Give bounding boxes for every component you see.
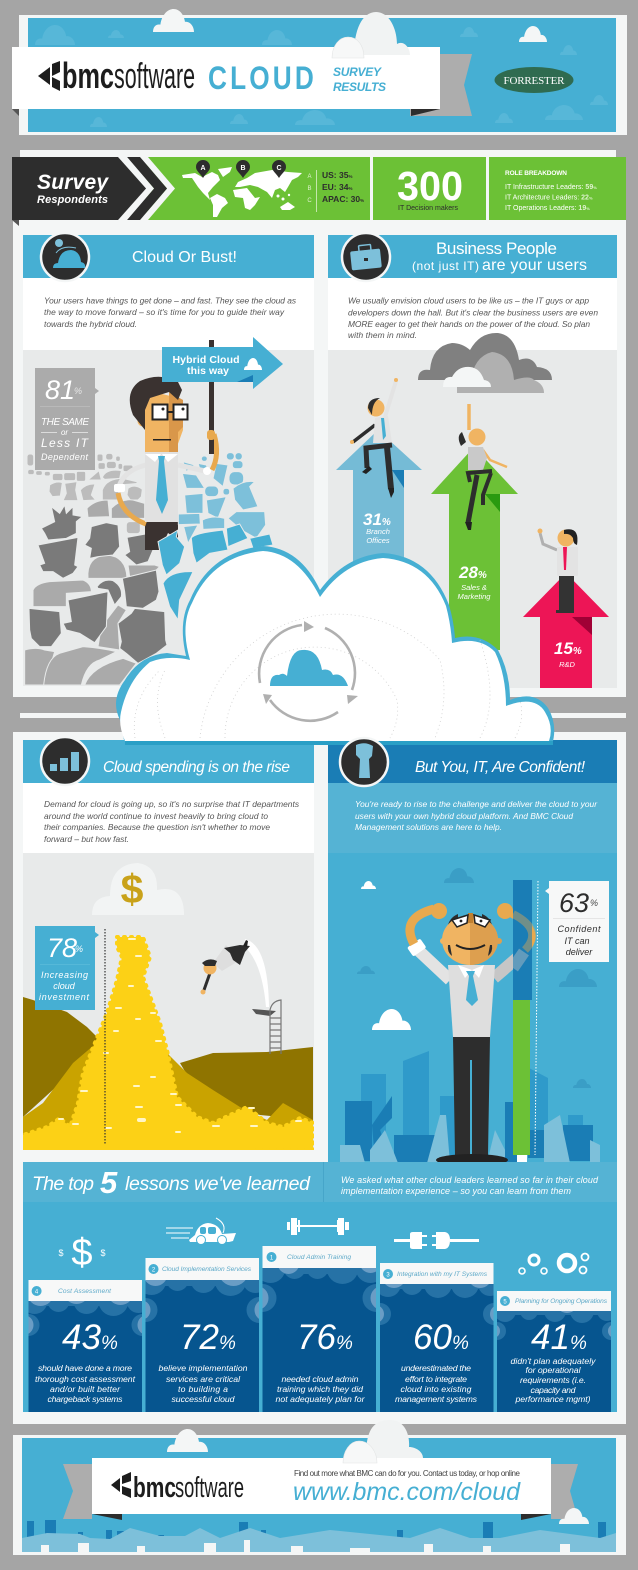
world map with pins: C: [276, 165, 282, 172]
lesson column: integration with my IT systems: [366, 1232, 508, 1412]
intro text: developers down the hall. But it's clear the business users are even: [348, 308, 598, 318]
right arm: [178, 465, 205, 471]
role breakdown: IT Architecture Leaders: 22%: [505, 194, 593, 202]
stat box: 78 percent: investment: [39, 992, 89, 1002]
intro text: [44, 296, 297, 329]
lesson column: integration with my IT systems: 3: [386, 1272, 390, 1278]
region percentages: [307, 170, 364, 212]
stat box: 78 percent: cloud: [53, 981, 76, 991]
header subtitle: survey results: SURVEY: [333, 65, 382, 79]
left arm: [418, 950, 450, 980]
icon: dollar: $: [71, 1232, 93, 1274]
icon: car: [166, 1218, 236, 1244]
region percentages: B: [307, 186, 312, 192]
heading: Cloud spending is on the rise: [103, 759, 290, 776]
chart: 63 percent progress bar: [513, 880, 538, 1163]
intro text: their companies. Because the question isn't whether to move: [44, 822, 270, 832]
footer banner: [13, 1420, 626, 1555]
dotted rings: [134, 614, 522, 738]
skyline: [27, 1520, 606, 1543]
panel: but you IT are confident: [328, 740, 617, 1163]
lesson column: integration with my IT systems: effort to integrate: [405, 1374, 467, 1384]
lesson column: planning for ongoing operations: requirements (i.e.: [520, 1375, 586, 1385]
intro text: MORE eager to get their hands on the power of the cloud. So plan: [348, 319, 590, 329]
region percentages: APAC: 30%: [322, 194, 364, 204]
lesson column: cloud admin training: 1: [270, 1256, 274, 1262]
survey title: Respondents: [37, 194, 108, 206]
arrow: 28 percent sales and marketing: [431, 404, 518, 650]
footer logo: bmc software: [111, 1472, 244, 1504]
arrow: 15 percent R and D: R&D: [559, 660, 575, 669]
lesson column: planning for ongoing operations: [486, 1254, 622, 1412]
stat box: 81 percent: 81: [45, 375, 75, 405]
stat box: 78 percent: [35, 926, 99, 1010]
shirt and tie: [145, 452, 178, 522]
lesson column: cost assessment: 4: [35, 1290, 39, 1296]
lesson column: cloud implementation services: services are critical: [166, 1374, 241, 1384]
panel backing: lower section: [13, 732, 626, 1424]
stat box: 78 percent: %: [75, 944, 83, 954]
crowd: grey heads: [25, 453, 167, 685]
section: top 5 lessons heading: The top: [32, 1173, 94, 1195]
stat box: 63 percent confident: %: [590, 898, 598, 908]
cloud with dollar sign: $: [121, 866, 144, 912]
ribbon: [410, 54, 472, 116]
icon: bar chart badge: [41, 737, 89, 785]
intro text: [44, 799, 300, 844]
arrow: 31 percent branch offices: Branch: [366, 527, 390, 536]
icon: briefcase badge: [342, 233, 390, 281]
icon: cloud: [270, 650, 348, 686]
lesson column: cloud admin training: 76%: [297, 1318, 353, 1357]
arrow: 31 percent branch offices: 31%: [363, 510, 391, 529]
intro text: Demand for cloud is going up, so it's no surprise that IT departments: [44, 799, 300, 809]
lesson column: cloud admin training: needed cloud admin: [282, 1374, 359, 1384]
forrester logo: FORRESTER: [504, 75, 565, 87]
icon: barbell: [287, 1218, 349, 1235]
stat box: 81 percent: Less IT: [41, 436, 90, 450]
intro text: around the world continue to invest heavily to bring cloud to: [44, 811, 268, 821]
lesson column: planning for ongoing operations: for operational: [526, 1365, 582, 1375]
stat: 300 IT decision makers: 300: [397, 163, 463, 209]
stat box: 81 percent: THE SAME: [41, 417, 89, 428]
icon: plug and socket: [394, 1232, 479, 1249]
arrow: 28 percent sales and marketing: Sales &: [461, 583, 487, 592]
world map with pins: B: [240, 165, 246, 172]
stat box: 78 percent: 78: [47, 933, 77, 963]
lesson column: integration with my IT systems: management systems: [395, 1394, 478, 1404]
head: [145, 392, 183, 452]
figure: diver and diving board: [200, 939, 281, 1054]
header banner: [12, 9, 627, 135]
heading: Cloud Or Bust!: [132, 249, 237, 266]
footer logo: bmc software: software: [175, 1472, 244, 1504]
section: top 5 lessons heading: lessons we've learned: [125, 1173, 311, 1195]
lesson column: cloud implementation services: [130, 1218, 276, 1412]
region percentages: US: 35%: [322, 170, 352, 180]
footer logo: bmc software: bmc: [133, 1472, 176, 1504]
stat box: 63 percent confident: IT can: [564, 936, 590, 946]
glasses: [152, 404, 168, 420]
icon: dollar: $: [100, 1248, 106, 1258]
lesson column: cloud admin training: not adequately plan for: [276, 1394, 366, 1404]
stat box: 81 percent: Dependent: [41, 452, 88, 462]
lesson column: cost assessment: 43%: [62, 1318, 118, 1357]
survey respondents band: [12, 157, 626, 226]
big central cloud with cycle arrows: [116, 546, 554, 745]
figure: man reaching up: [350, 378, 398, 498]
heading: [412, 239, 587, 274]
intro text: [355, 799, 598, 832]
top clouds: [153, 9, 194, 32]
role breakdown: IT Infrastructure Leaders: 59%: [505, 184, 597, 191]
stat box: 81 percent: %: [74, 386, 82, 396]
panel: cloud or bust: [23, 235, 314, 686]
intro text: You're ready to rise to the challenge and deliver the cloud to your: [355, 799, 598, 809]
sign: hybrid cloud this way: [162, 337, 283, 454]
stat box: 63 percent confident: [545, 881, 609, 962]
shirt and tie: [448, 965, 495, 1037]
icon: dollar: $: [58, 1248, 64, 1258]
region percentages: C: [307, 198, 312, 204]
heading: Business People: [436, 239, 557, 258]
panel: cloud spending: [23, 740, 314, 1150]
lesson column: cost assessment: Cost Assessment: [58, 1288, 112, 1295]
lesson column: cloud implementation services: to building a: [178, 1384, 228, 1394]
lesson column: planning for ongoing operations: capacity and: [530, 1385, 577, 1395]
character: man with glasses holding sign: [114, 377, 217, 524]
lesson column: cloud admin training: Cloud Admin Training: [287, 1254, 351, 1261]
clouds: [167, 1429, 208, 1452]
role breakdown: [505, 170, 597, 212]
footer call to action: www.bmc.com/cloud: [293, 1478, 521, 1506]
lesson column: integration with my IT systems: underestimated the: [401, 1363, 471, 1373]
lesson column: cost assessment: thorough cost assessment: [35, 1374, 136, 1384]
intro text: the way to move forward – so it's time for you to guide their way: [44, 307, 285, 317]
sign: hybrid cloud this way: Hybrid Cloud: [172, 354, 240, 366]
header subtitle: survey results: [333, 65, 386, 94]
cloud with dollar sign: [92, 863, 184, 915]
sky clouds: [357, 868, 597, 1088]
head: [447, 914, 493, 935]
lesson column: integration with my IT systems: 60%: [413, 1318, 469, 1357]
lesson column: planning for ongoing operations: Planning for Ongoing Operations: [515, 1298, 608, 1305]
stat box: 81 percent: or: [61, 428, 68, 437]
stat: 300 IT decision makers: IT Decision makers: [398, 205, 458, 212]
region percentages: EU: 34%: [322, 182, 352, 192]
crowd: blue heads: [158, 453, 273, 620]
section: top 5 lessons heading: [23, 1162, 617, 1202]
header logo: bmc software: bmc: [62, 55, 114, 96]
city skyline: [340, 1051, 600, 1163]
region percentages: A: [307, 174, 312, 180]
arrow: 28 percent sales and marketing: Marketing: [458, 592, 491, 601]
coin highlights: [58, 938, 302, 1133]
left arm: [119, 465, 146, 486]
icon: raised fist badge: [340, 738, 388, 786]
intro text: Management solutions are here to help.: [355, 822, 502, 832]
lesson column: cost assessment: and/or built better: [50, 1384, 121, 1394]
lesson column: cloud implementation services: 72%: [180, 1318, 236, 1357]
icon: dollar: [58, 1232, 106, 1274]
panel backing: survey section: [13, 150, 626, 718]
storm clouds: [418, 333, 552, 393]
chart: pile of gold coins over hills: [23, 929, 313, 1150]
intro text: users with your own hybrid cloud platform. And BMC Cloud: [355, 811, 573, 821]
world map with pins: A: [200, 165, 206, 172]
dotted scale line: [104, 929, 106, 1144]
lesson column: planning for ongoing operations: didn't plan adequately: [510, 1356, 596, 1366]
panel: business people: [328, 235, 617, 688]
lesson column: cloud implementation services: 2: [152, 1268, 156, 1274]
intro text: [348, 296, 598, 340]
lesson column: cloud implementation services: successful cloud: [172, 1394, 236, 1404]
ribbon: [63, 1464, 92, 1519]
lesson column: cost assessment: [14, 1232, 158, 1412]
lesson column: cost assessment: chargeback systems: [48, 1394, 123, 1404]
lesson column: cloud admin training: training which they did: [277, 1384, 364, 1394]
intro text: with them in mind.: [348, 330, 417, 340]
stat box: 63 percent confident: 63: [559, 888, 589, 918]
section: top 5 lessons heading: implementation experience – so you can learn from them: [341, 1186, 572, 1196]
lesson column: planning for ongoing operations: 41%: [531, 1318, 587, 1357]
header title: cloud: CLOUD: [208, 62, 314, 97]
stat box: 63 percent confident: Confident: [558, 924, 601, 934]
figure: man looking up: [538, 528, 578, 613]
right arm: [494, 952, 524, 978]
stat box: 81 percent: [35, 368, 99, 470]
figure: confident man flexing: [407, 903, 531, 1166]
lesson column: cloud implementation services: Cloud Implementation Services: [162, 1266, 252, 1273]
header logo: bmc software: [38, 55, 195, 96]
intro text: forward – but how fast.: [44, 834, 129, 844]
section: top 5 lessons heading: 5: [100, 1165, 118, 1200]
footer call to action: Find out more what BMC can do for you. Contact us today, or hop online: [294, 1469, 521, 1478]
lesson column: integration with my IT systems: Integration with my IT Systems: [397, 1271, 488, 1278]
arm showing through the bar: [513, 914, 532, 968]
character: man with glasses holding sign (legs): [145, 522, 178, 550]
forrester logo: [494, 67, 574, 93]
header logo: bmc software: software: [114, 55, 195, 96]
lesson column: cloud implementation services: believe implementation: [158, 1363, 248, 1373]
arrow: 15 percent R and D: [523, 528, 609, 688]
section: top 5 lessons heading: We asked what other cloud leaders learned so far in their cloud: [341, 1175, 599, 1185]
stat box: 78 percent: Increasing: [41, 970, 88, 980]
role breakdown: IT Operations Leaders: 19%: [505, 205, 590, 212]
figure: woman reaching up: [459, 404, 507, 530]
arrow: 28 percent sales and marketing: 28%: [458, 563, 487, 582]
intro text: towards the hybrid cloud.: [44, 319, 137, 329]
header subtitle: survey results: RESULTS: [333, 80, 386, 94]
lesson column: integration with my IT systems: cloud into existing: [400, 1384, 472, 1394]
intro text: We usually envision cloud users to be like us – the IT guys or app: [348, 296, 589, 306]
background clouds: [35, 25, 608, 127]
survey title: [37, 171, 109, 206]
heading: (not just IT): [412, 259, 479, 273]
icon: gears: [519, 1254, 588, 1274]
lesson column: planning for ongoing operations: performance mgmt): [514, 1394, 591, 1404]
lesson column: cloud admin training: [244, 1218, 394, 1412]
cycle arrows: [259, 625, 355, 721]
heading: are your users: [482, 257, 587, 274]
arrow: 31 percent branch offices: [336, 378, 422, 565]
survey title: Survey: [37, 171, 109, 194]
sign: hybrid cloud this way: this way: [187, 365, 229, 377]
world map with pins: [182, 160, 302, 217]
lesson column: planning for ongoing operations: 5: [503, 1300, 507, 1306]
arrow: 31 percent branch offices: Offices: [366, 536, 390, 545]
role breakdown: ROLE BREAKDOWN: [505, 170, 567, 177]
lessons background: [23, 1202, 617, 1412]
heading: But You, IT, Are Confident!: [415, 759, 586, 776]
stat box: 63 percent confident: deliver: [566, 947, 593, 957]
arrow: 15 percent R and D: 15%: [554, 639, 582, 658]
lesson column: cost assessment: should have done a more: [38, 1363, 132, 1373]
icon: cloud guide badge: [41, 233, 89, 281]
intro text: Your users have things to get done – and fast. They see the cloud as: [44, 296, 297, 306]
